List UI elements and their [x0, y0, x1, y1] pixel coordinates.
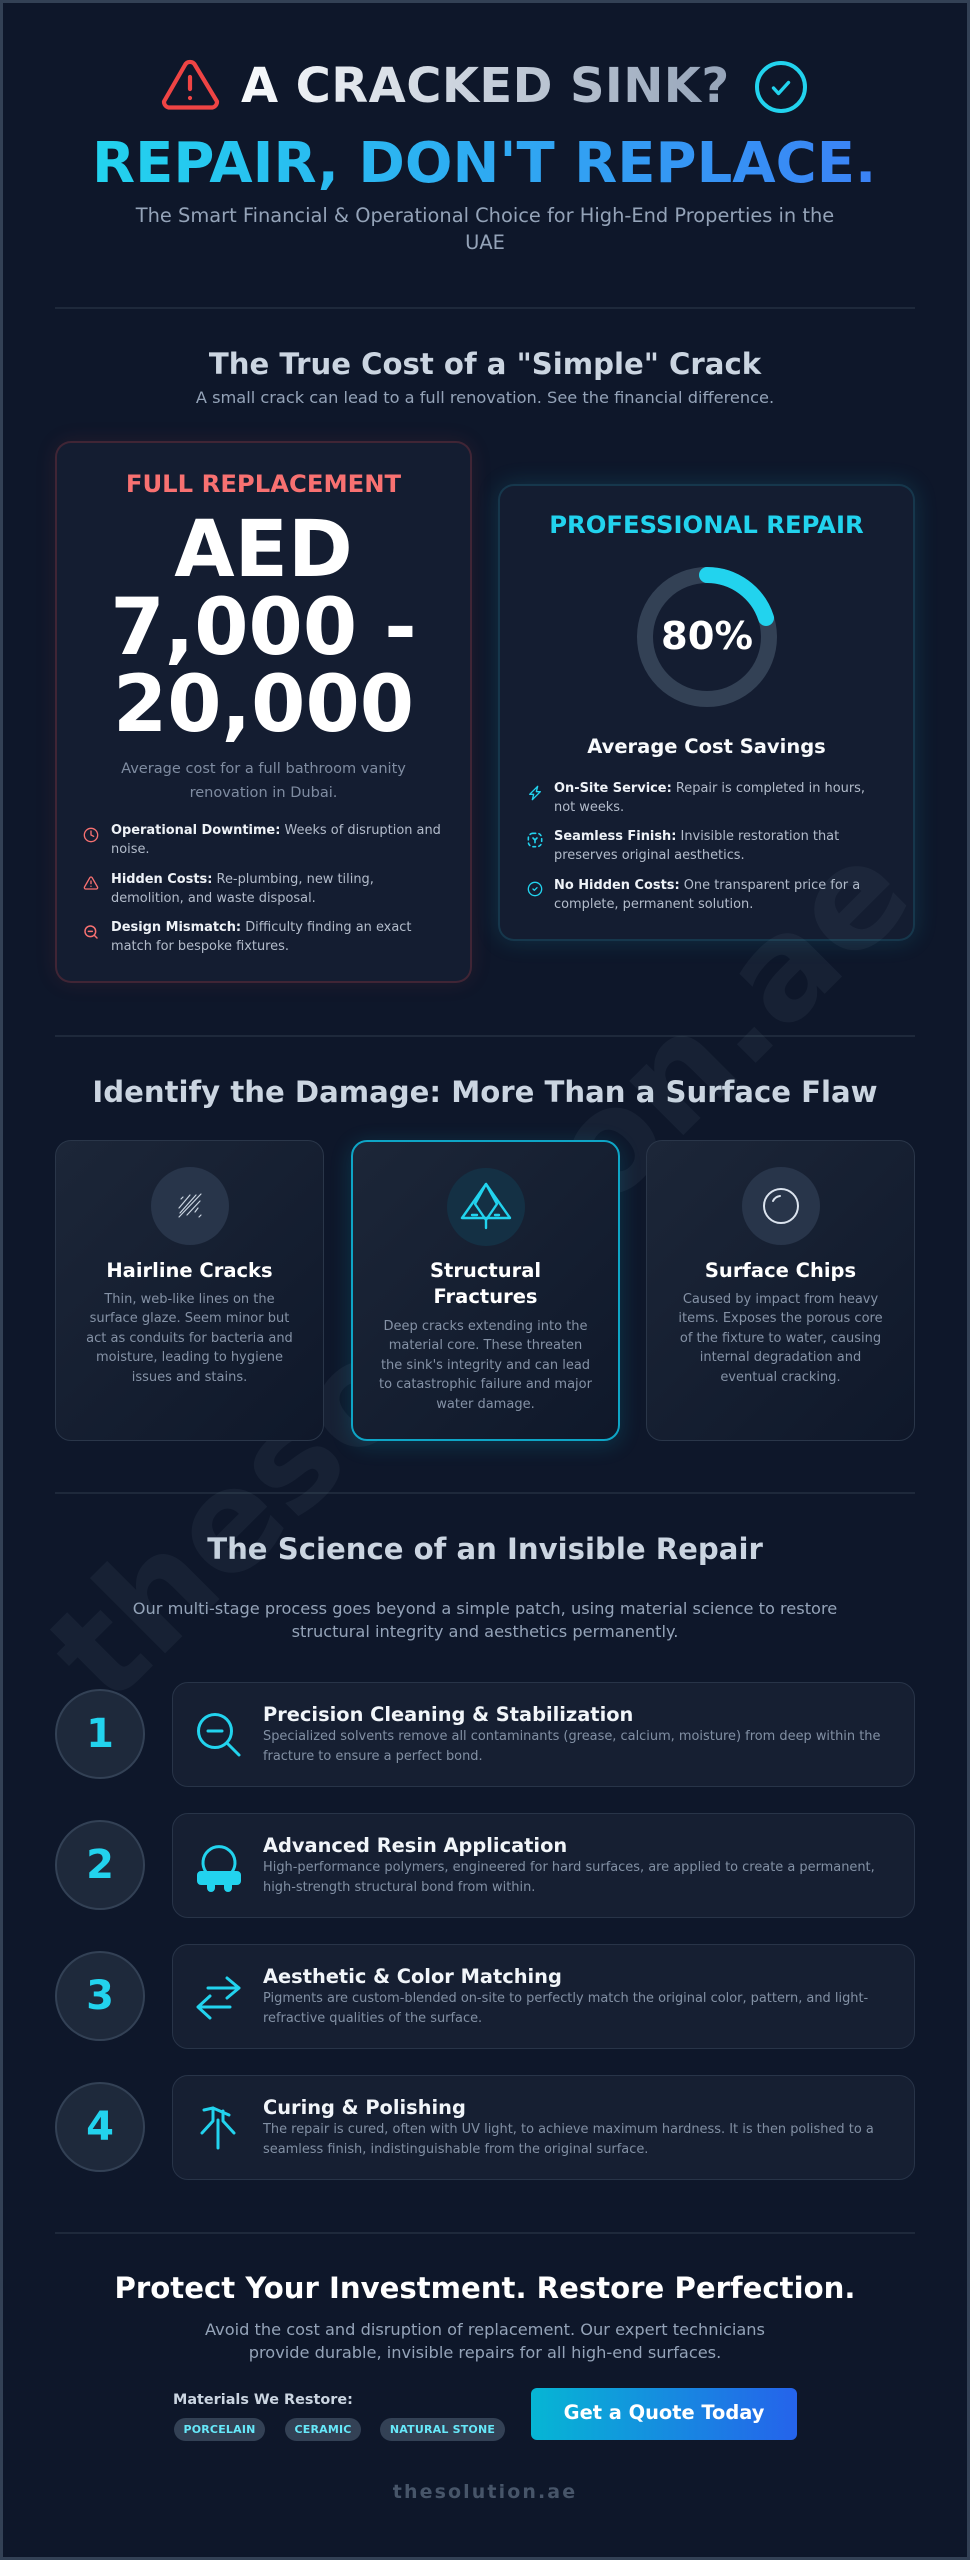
panel heading: PROFESSIONAL REPAIR: [549, 510, 864, 539]
item: seamless: Seamless Finish: Invisible restoration that: [554, 829, 839, 844]
step number: 3: [86, 1973, 114, 2019]
step text: fracture to ensure a perfect bond.: [263, 1749, 483, 1764]
icon: resin: [197, 1845, 241, 1892]
step 4: [55, 2075, 915, 2180]
icon: triangle: [84, 876, 98, 890]
step number: [55, 1820, 145, 1910]
tag: natural stone: NATURAL STONE: [390, 2423, 495, 2436]
step 1: [55, 1682, 915, 1787]
process section heading: The Science of an Invisible Repair: [207, 1532, 763, 1566]
item: hidden costs: Hidden Costs: Re-plumbing, new tiling,: [111, 872, 374, 887]
card text: [379, 1319, 592, 1412]
card text: to catastrophic failure and major: [379, 1377, 592, 1392]
button: [531, 2388, 797, 2440]
tag: ceramic: CERAMIC: [294, 2423, 352, 2436]
cost section heading: The True Cost of a "Simple" Crack: [209, 347, 761, 381]
panel: professional repair: [498, 484, 915, 941]
watermark: thesolution.ae: [18, 810, 941, 1733]
call to action heading: Protect Your Investment. Restore Perfection.: [115, 2271, 855, 2305]
panel: surface chips: [646, 1140, 915, 1441]
icon: magnifier: [197, 1713, 241, 1757]
icon: curing: [200, 2106, 236, 2150]
process section text: Our multi-stage process goes beyond a simple patch, using material science to restore: [133, 1599, 837, 1618]
card text: the sink's integrity and can lead: [381, 1358, 590, 1373]
step text: refractive qualities of the surface.: [263, 2011, 482, 2026]
item: on-site: not weeks.: [554, 800, 624, 815]
step text: High-performance polymers, engineered for hard surfaces, are applied to create a permanent,: [263, 1860, 875, 1875]
step title: Aesthetic & Color Matching: [263, 1965, 562, 1988]
step text: The repair is cured, often with UV light, to achieve maximum hardness. It is then polished to a: [263, 2122, 874, 2137]
donut chart: 80%: [637, 567, 777, 707]
step text: seamless finish, indistinguishable from the original surface.: [263, 2142, 648, 2157]
subtitle: [136, 204, 834, 254]
icon: fracture: [447, 1168, 525, 1246]
card text: material core. These threaten: [389, 1338, 582, 1353]
step title: Curing & Polishing: [263, 2096, 466, 2119]
card title: Surface Chips: [705, 1259, 856, 1282]
item: hidden costs: demolition, and waste disposal.: [111, 891, 316, 906]
call to action text: [205, 2320, 765, 2362]
item: downtime: Operational Downtime: Weeks of disruption and: [111, 823, 441, 838]
card title: Fractures: [433, 1285, 538, 1308]
price caption: renovation in Dubai.: [190, 784, 337, 800]
card text: issues and stains.: [132, 1370, 247, 1385]
tag: porcelain: PORCELAIN: [183, 2423, 256, 2436]
icon: dashed square: [528, 832, 542, 848]
donut value: 80%: [661, 614, 753, 659]
item: no hidden costs: No Hidden Costs: One transparent price for a: [554, 878, 860, 893]
savings label: Average Cost Savings: [587, 735, 826, 758]
panel heading: FULL REPLACEMENT: [126, 469, 401, 498]
step text: [262, 2122, 874, 2157]
step panel: [172, 1944, 915, 2049]
step number: [55, 2082, 145, 2172]
icon: swap arrows: [196, 1976, 241, 2020]
step number: [55, 1951, 145, 2041]
step text: high-strength structural bond from within.: [263, 1880, 535, 1895]
card text: Caused by impact from heavy: [683, 1292, 878, 1307]
item: on-site: On-Site Service: Repair is completed in hours,: [554, 781, 865, 796]
panel: hairline cracks: [55, 1140, 324, 1441]
step text: [263, 1729, 880, 1764]
step text: [263, 1991, 868, 2026]
step title: Advanced Resin Application: [263, 1834, 567, 1857]
icon: search: [84, 925, 98, 939]
step panel: [172, 1813, 915, 1918]
icon: clock: [84, 828, 98, 842]
cost section subtitle: A small crack can lead to a full renovation. See the financial difference.: [196, 388, 774, 407]
price: AED: [174, 505, 353, 595]
step 3: [55, 1944, 915, 2049]
headline: REPAIR, DON'T REPLACE.: [92, 131, 876, 196]
step number: [55, 1689, 145, 1779]
card text: items. Exposes the porous core: [678, 1311, 883, 1326]
item: design mismatch: Design Mismatch: Difficulty finding an exact: [111, 920, 411, 935]
tag: porcelain: [174, 2418, 265, 2441]
subtitle: UAE: [465, 231, 505, 254]
item: design mismatch: match for bespoke fixtures.: [111, 939, 289, 954]
card text: surface glaze. Seem minor but: [90, 1311, 289, 1326]
item: hidden costs: [111, 872, 374, 906]
step number: 2: [86, 1842, 114, 1888]
card title: Structural: [430, 1259, 541, 1282]
item: downtime: noise.: [111, 842, 150, 857]
card text: Deep cracks extending into the: [383, 1319, 588, 1334]
icon: check circle: [755, 61, 807, 113]
card text: Thin, web-like lines on the: [104, 1292, 275, 1307]
call to action text: provide durable, invisible repairs for all high-end surfaces.: [249, 2343, 721, 2362]
card title: Hairline Cracks: [106, 1259, 273, 1282]
step text: [263, 1860, 875, 1895]
step panel: [172, 1682, 915, 1787]
materials label: Materials We Restore:: [173, 2392, 353, 2408]
price caption: [121, 760, 406, 800]
panel: full replacement: [55, 441, 472, 983]
item: on-site: [554, 781, 865, 815]
card text: [678, 1292, 883, 1385]
step text: Pigments are custom-blended on-site to perfectly match the original color, pattern, and light-: [263, 1991, 868, 2006]
card text: [86, 1292, 293, 1385]
header: [92, 58, 876, 254]
tag: ceramic: [285, 2418, 361, 2441]
card title: [430, 1259, 541, 1308]
damage section heading: Identify the Damage: More Than a Surface Flaw: [92, 1075, 878, 1109]
panel: structural fractures: [351, 1140, 620, 1441]
step title: Precision Cleaning & Stabilization: [263, 1703, 633, 1726]
card text: act as conduits for bacteria and: [86, 1331, 293, 1346]
icon: check: [528, 882, 542, 896]
price: [110, 505, 417, 750]
icon: warning triangle: [162, 60, 220, 110]
step number: 4: [86, 2104, 114, 2150]
card text: of the fixture to water, causing: [680, 1331, 881, 1346]
step 2: [55, 1813, 915, 1918]
icon: hairline: [151, 1167, 229, 1245]
footer brand: thesolution.ae: [393, 2481, 577, 2503]
tag: natural stone: [380, 2418, 505, 2441]
call to action text: Avoid the cost and disruption of replacement. Our expert technicians: [205, 2320, 765, 2339]
subtitle: The Smart Financial & Operational Choice for High-End Properties in the: [136, 204, 834, 227]
item: downtime: [111, 823, 441, 857]
price: 7,000 -: [110, 582, 417, 672]
item: seamless: preserves original aesthetics.: [554, 848, 745, 863]
step panel: [172, 2075, 915, 2180]
card text: internal degradation and: [700, 1350, 861, 1365]
item: design mismatch: [111, 920, 412, 954]
title: A CRACKED SINK?: [241, 58, 730, 114]
card text: water damage.: [436, 1397, 535, 1412]
process section text: structural integrity and aesthetics permanently.: [292, 1622, 678, 1641]
step number: 1: [86, 1711, 114, 1757]
icon: zap: [529, 786, 541, 800]
card text: eventual cracking.: [720, 1370, 841, 1385]
process section text: [133, 1599, 837, 1641]
item: no hidden costs: [554, 878, 860, 912]
price: 20,000: [113, 660, 414, 750]
item: no hidden costs: complete, permanent solution.: [554, 897, 753, 912]
step text: Specialized solvents remove all contaminants (grease, calcium, moisture) from deep within the: [263, 1729, 880, 1744]
item: seamless: [554, 829, 839, 863]
price caption: Average cost for a full bathroom vanity: [121, 760, 406, 777]
button: Get a Quote Today: [564, 2401, 764, 2424]
card text: moisture, leading to hygiene: [96, 1350, 283, 1365]
icon: chip: [742, 1167, 820, 1245]
